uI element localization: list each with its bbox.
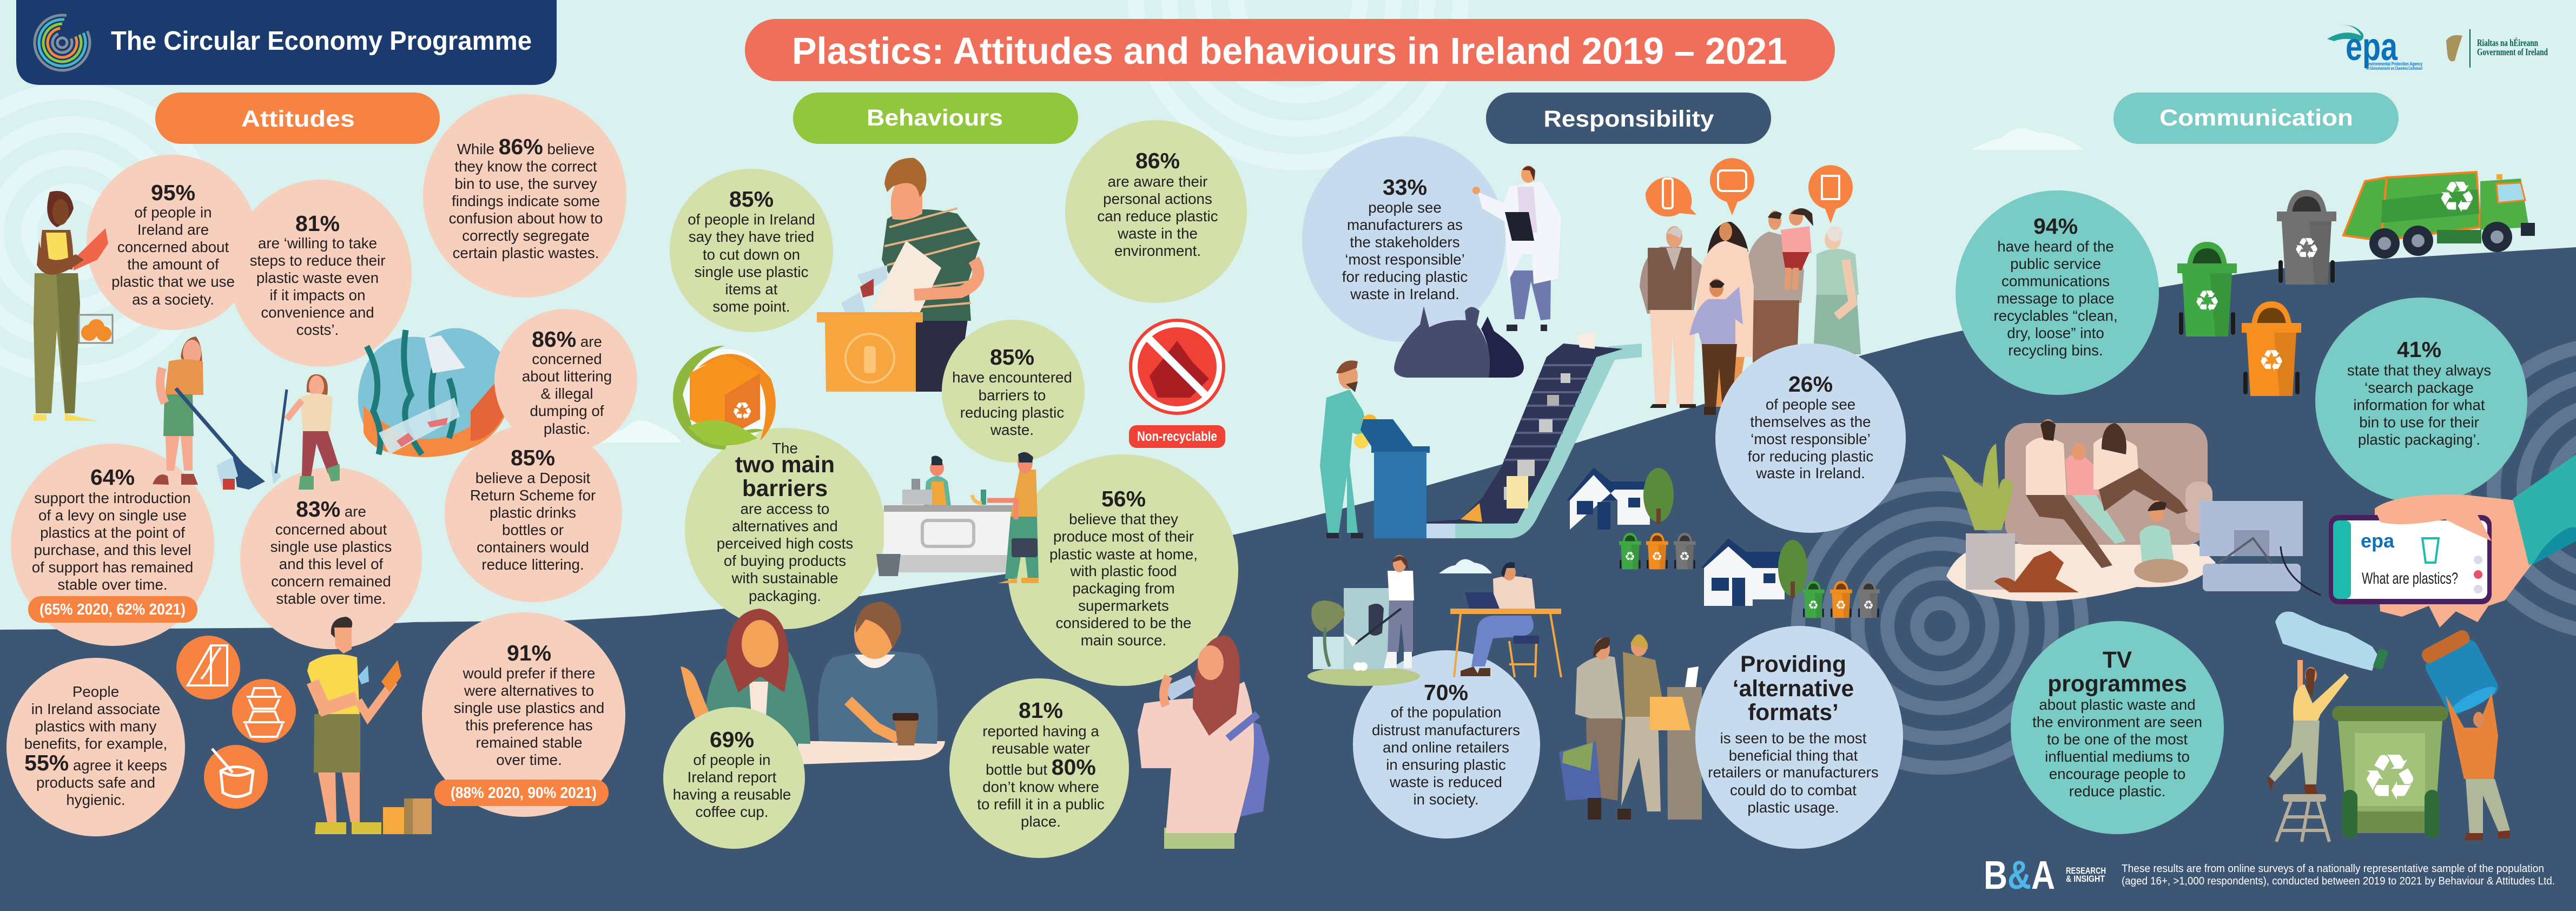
bubble: 94% clean dry loose: 94% xyxy=(2033,214,2078,239)
bubble: 56% home: main source. xyxy=(1081,632,1166,649)
icon: recycling box: ♻ xyxy=(731,398,753,425)
icon: food container speech bubble xyxy=(1710,158,1754,215)
bubble: 86% littering xyxy=(494,309,637,452)
bubble: 85% barriers: waste. xyxy=(990,421,1034,438)
illustration: orange wheelie bin: ♻ xyxy=(2258,344,2284,378)
bubble: 81% willing: convenience and xyxy=(261,304,374,321)
bubble: providing alternative formats: beneficial thing that xyxy=(1729,747,1858,764)
bubble: 91% alternatives: 91% xyxy=(507,641,551,665)
bubble: people associate benefits: plastics with many xyxy=(35,718,156,735)
bubble: 64% levy: purchase, and this level xyxy=(34,542,191,558)
illustration: man sorting waste into bin xyxy=(817,158,980,392)
callout: 2020 2021 alternatives xyxy=(434,780,609,806)
boy xyxy=(1689,279,1743,415)
section heading: Communication xyxy=(2113,93,2399,144)
bubble: 86% aware xyxy=(1065,120,1247,303)
bubble: 70% distrust: and online retailers xyxy=(1383,739,1509,756)
logo: Government of Ireland: Government of Ireland xyxy=(2477,47,2548,57)
bubble: 33% manufacturers: manufacturers as xyxy=(1347,216,1463,233)
bubble: 41% search packaging: ‘search package xyxy=(2364,379,2474,396)
bubble: 70% distrust: of the population xyxy=(1391,704,1501,721)
bubble: 86% littering: concerned xyxy=(532,351,602,367)
callout: 2020 2021 levy xyxy=(28,596,197,623)
bubble: 91% alternatives: remained stable xyxy=(475,734,583,751)
grandfather xyxy=(1640,226,1702,408)
bubble: 91% alternatives xyxy=(422,612,625,817)
cloud top right xyxy=(1971,128,2084,150)
bubble: 85% cut down: of people in Ireland xyxy=(688,211,815,228)
bubble: 64% levy: of a levy on single use xyxy=(38,507,187,524)
bubble: 41% search packaging: bin to use for their xyxy=(2359,414,2479,431)
bubble: 64% levy xyxy=(11,444,214,646)
bubble: 86% littering: 86% are xyxy=(532,327,602,352)
grandmother xyxy=(1813,226,1861,354)
bubble: TV programmes: encourage people to xyxy=(2049,765,2185,782)
illustration: man with packaging xyxy=(307,617,432,834)
bubble: 26% themselves: 26% xyxy=(1788,372,1833,397)
logo: B&A research and insight: & INSIGHT xyxy=(2066,874,2105,884)
footer note: (aged 16+, >1,000 respondents), conducted between 2019 to 2021 by Behaviour & Attitudes Ltd. xyxy=(2122,875,2555,887)
bubble shape: 95% xyxy=(87,155,257,330)
bubble: 86% correct bin: confusion about how to xyxy=(449,210,603,227)
bubble: 94% clean dry loose: have heard of the xyxy=(1997,238,2114,255)
illustration: hand holding phone xyxy=(2329,454,2576,628)
daughter xyxy=(1781,208,1813,289)
bubble: 83% single use: single use plastics xyxy=(270,538,392,555)
bubble: 56% home: 56% xyxy=(1101,486,1146,511)
bubble: 41% search packaging: 41% xyxy=(2397,337,2441,362)
bubble: 26% themselves xyxy=(1715,344,1906,533)
illustration: couple shopping xyxy=(1559,634,1702,820)
bubble: 86% aware: 86% xyxy=(1135,148,1180,173)
icon: bottle speech bubble xyxy=(1646,177,1696,216)
bubble: providing alternative formats: formats’ xyxy=(1748,700,1839,725)
bubble: 85% cut down: to cut down on xyxy=(703,246,800,263)
illustration: rubbish bags xyxy=(1394,306,1524,378)
bubble: 86% correct bin: certain plastic wastes. xyxy=(453,245,599,261)
bubble: 94% clean dry loose xyxy=(1956,190,2159,395)
illustration: green wheelie bin: ♻ xyxy=(2194,284,2220,318)
illustration: recycling truck: ♻ xyxy=(2438,172,2476,222)
text: 95% concerned: Ireland are xyxy=(137,221,209,238)
bubble: 64% levy: 64% xyxy=(90,465,135,490)
bubble: 56% home: produce most of their xyxy=(1053,528,1194,545)
icon: recycling box xyxy=(673,346,776,450)
logo: B&A research and insight: RESEARCH xyxy=(2066,866,2106,876)
bubble: 85% barriers xyxy=(942,320,1085,463)
bubble: people associate benefits: products safe and xyxy=(36,774,155,791)
bubble: 85% deposit return: plastic drinks xyxy=(490,504,576,521)
bubble: 56% home: plastic waste at home, xyxy=(1049,546,1198,563)
bubble: two main barriers xyxy=(685,428,885,629)
illustration: green wheelie bin xyxy=(2177,242,2237,336)
bubble: TV programmes: TV xyxy=(2103,648,2132,673)
bubble: 33% manufacturers: ‘most responsible’ xyxy=(1345,251,1465,268)
illustration: waste worker and blue bin xyxy=(1320,360,1430,538)
illustration: recycling truck xyxy=(2343,172,2535,259)
bubble: 86% aware: are aware their xyxy=(1108,173,1207,190)
bubble: 69% coffee cup: having a reusable xyxy=(673,786,791,803)
bubble: two main barriers: two main xyxy=(735,452,835,478)
illustration: customer at checkout xyxy=(987,452,1039,583)
cloud middle xyxy=(595,420,682,443)
bubble: 81% water bottle: 81% xyxy=(1019,698,1063,723)
section heading: Behaviours: Behaviours xyxy=(867,105,1003,131)
bubble: people associate benefits: in Ireland associate xyxy=(31,701,160,717)
section heading: Communication: Communication xyxy=(2159,105,2353,131)
bubble: 33% manufacturers: waste in Ireland. xyxy=(1350,286,1459,302)
bubble: 86% correct bin: they know the correct xyxy=(454,158,597,175)
bubble: 56% home: believe that they xyxy=(1069,511,1178,527)
bubble: 69% coffee cup: of people in xyxy=(693,751,771,768)
bubble: 86% aware: environment. xyxy=(1114,242,1201,259)
light ring pattern centre xyxy=(1136,0,1461,162)
icon: coffee tub xyxy=(204,745,268,809)
bubble: providing alternative formats: could do to combat xyxy=(1730,782,1857,798)
illustration: people with giant bottle, jar and bin: ♻ xyxy=(2361,740,2419,815)
bubble: 69% coffee cup: 69% xyxy=(710,727,754,752)
bubble: providing alternative formats: ‘alternative xyxy=(1733,676,1854,702)
logo: EPA xyxy=(2327,25,2422,71)
illustration: seaweed and plastic xyxy=(358,328,505,457)
callout: 2020 2021 levy: (65% 2020, 62% 2021) xyxy=(39,601,186,618)
bubble: 91% alternatives: this preference has xyxy=(465,717,593,734)
bubble: 26% themselves: themselves as the xyxy=(1750,413,1871,430)
bubble: people associate benefits xyxy=(6,658,185,836)
bubble: people associate benefits: 55% agree it keeps xyxy=(24,750,167,775)
bubble: 85% deposit return: containers would xyxy=(477,539,589,556)
callout: Non-recyclable label: Non-recyclable xyxy=(1137,429,1217,444)
illustration: hand holding phone: What are plastics? xyxy=(2362,570,2458,587)
text: 95% concerned: the amount of xyxy=(127,256,219,273)
bubble: 81% willing: steps to reduce their xyxy=(250,252,385,269)
bubble: providing alternative formats xyxy=(1695,626,1903,849)
callout: Non-recyclable label xyxy=(1129,425,1225,448)
bubble: 81% water bottle: reported having a xyxy=(982,723,1099,740)
illustration: three bins one: ♻ xyxy=(1679,550,1690,564)
bubble: 91% alternatives: were alternatives to xyxy=(464,682,594,699)
bubble: 91% alternatives: single use plastics and xyxy=(454,699,604,716)
illustration: family watching tv on sofa xyxy=(1942,419,2216,602)
bubble: 26% themselves: ‘most responsible’ xyxy=(1751,431,1871,447)
footer note xyxy=(2122,863,2555,887)
bubble: people associate benefits: People xyxy=(72,683,119,700)
text: 95% concerned: plastic that we use xyxy=(111,273,235,290)
dark hill xyxy=(0,247,2576,911)
illustration: people with giant bottle, jar and bin xyxy=(2267,611,2510,842)
bubble: 85% deposit return: bottles or xyxy=(502,521,564,538)
illustration: grey wheelie bin: ♻ xyxy=(2294,232,2320,266)
logo: EPA: Environmental Protection Agency xyxy=(2366,61,2422,67)
illustration: waste conveyor belt xyxy=(1401,331,1642,538)
callout: 2020 2021 alternatives: (88% 2020, 90% 2021) xyxy=(451,784,597,802)
bubble: 94% clean dry loose: dry, loose” into xyxy=(2007,325,2104,341)
illustration: orange wheelie bin xyxy=(2242,301,2301,396)
bubble: 85% cut down: single use plastic xyxy=(695,263,809,280)
bubble: 69% coffee cup: Ireland report xyxy=(688,769,777,785)
illustration: woman with basket xyxy=(34,191,113,421)
bubble: 69% coffee cup: coffee cup. xyxy=(696,803,768,820)
illustration: three bins two xyxy=(1802,581,1880,618)
text: 95% concerned: 95% xyxy=(151,180,195,205)
bubble: 85% cut down: say they have tried xyxy=(689,228,814,245)
bubble: 94% clean dry loose: communications xyxy=(2002,273,2110,289)
bubble: 64% levy: stable over time. xyxy=(57,576,168,593)
bubble: 85% cut down: some point. xyxy=(712,298,790,315)
bubble: 26% themselves: waste in Ireland. xyxy=(1755,465,1865,481)
bubble: TV programmes: the environment are seen xyxy=(2032,714,2202,730)
bubble: two main barriers: packaging. xyxy=(749,587,821,604)
section heading: Behaviours xyxy=(793,93,1078,144)
illustration: three bins two: ♻ xyxy=(1808,599,1819,612)
bubble: TV programmes xyxy=(2011,621,2224,834)
logo: Government of Ireland: Rialtas na hÉireann xyxy=(2477,37,2538,48)
bubble: 33% manufacturers: the stakeholders xyxy=(1350,234,1460,250)
bubble: two main barriers: The xyxy=(772,440,798,457)
bubble: 70% distrust: in ensuring plastic xyxy=(1386,756,1506,773)
bubble: 85% deposit return: believe a Deposit xyxy=(475,470,591,486)
bubble: 41% search packaging: information for what xyxy=(2353,397,2485,413)
bubble: 86% littering: dumping of xyxy=(530,402,604,419)
bubble: 81% willing: if it impacts on xyxy=(270,287,365,303)
illustration: three bins two: ♻ xyxy=(1863,599,1874,612)
bubble: 33% manufacturers: 33% xyxy=(1383,175,1427,200)
bubble: 86% correct bin: bin to use, the survey xyxy=(454,175,597,192)
logo: EPA: epa xyxy=(2346,25,2398,69)
bubble: 86% aware: personal actions xyxy=(1103,190,1212,207)
bubble: 64% levy: support the introduction xyxy=(34,490,191,506)
icon: non-recyclable sign xyxy=(1129,324,1225,448)
bubble: 86% correct bin: findings indicate some xyxy=(452,193,600,209)
bubble: 33% manufacturers: for reducing plastic xyxy=(1342,268,1468,285)
bubble: 83% single use: stable over time. xyxy=(276,590,386,607)
bubble: TV programmes: reduce plastic. xyxy=(2069,783,2165,800)
bubble: two main barriers: alternatives and xyxy=(732,518,838,534)
father xyxy=(1747,210,1804,362)
bubble: two main barriers: barriers xyxy=(742,476,828,501)
bubble: TV programmes: influential mediums to xyxy=(2045,748,2190,765)
bubble: 56% home: supermarkets xyxy=(1078,597,1169,614)
bubble: 85% cut down xyxy=(670,169,833,332)
bubble: 83% single use: concerned about xyxy=(275,521,387,538)
illustration: checkout scene xyxy=(876,456,1013,576)
illustration: woman with rake xyxy=(153,336,281,490)
bubble: people associate benefits: benefits, for example, xyxy=(24,735,167,752)
bubble: 94% clean dry loose: public service xyxy=(2010,255,2101,272)
bubble: 41% search packaging: state that they always xyxy=(2347,362,2491,379)
bubble: providing alternative formats: plastic usage. xyxy=(1747,799,1839,816)
bubble: 85% barriers: barriers to xyxy=(979,387,1046,404)
bubble: 56% home: with plastic food xyxy=(1070,563,1177,579)
illustration: three bins one xyxy=(1619,533,1696,569)
header bar: The Circular Economy Programme xyxy=(16,0,557,85)
text: 95% concerned: as a society. xyxy=(132,291,214,308)
bubble: 81% water bottle xyxy=(949,678,1129,858)
cloud over dark area xyxy=(1439,559,1492,573)
bubble: 69% coffee cup xyxy=(663,707,805,849)
illustration: two people with coffee xyxy=(681,602,945,764)
bubble: 86% littering: & illegal xyxy=(541,385,593,402)
header title: The Circular Economy Programme xyxy=(111,27,532,56)
bubble: TV programmes: programmes xyxy=(2047,671,2187,697)
logo: B&A research and insight xyxy=(1984,853,2106,897)
icon: sandwich pack xyxy=(176,636,240,699)
illustration: house one xyxy=(1567,467,1674,530)
illustration: woman with laptop xyxy=(1450,562,1561,677)
bubble: 85% deposit return xyxy=(445,425,622,602)
icon: carton speech bubble xyxy=(1808,165,1853,223)
illustration: litter picking woman xyxy=(1307,555,1420,686)
section heading: Responsibility: Responsibility xyxy=(1544,106,1714,132)
bubble: 86% aware: can reduce plastic xyxy=(1097,208,1218,225)
bubble: providing alternative formats: retailers or manufacturers xyxy=(1708,764,1879,781)
bubble: two main barriers: with sustainable xyxy=(731,570,838,586)
bubble: 83% single use: concern remained xyxy=(271,573,391,590)
bubble: 85% barriers: have encountered xyxy=(952,369,1072,386)
bubble: 94% clean dry loose: message to place xyxy=(1997,290,2115,307)
dark ring pattern centre xyxy=(1798,484,2082,768)
illustration: hand holding phone: epa xyxy=(2361,530,2395,552)
bubble: 56% home: packaging from xyxy=(1072,580,1175,597)
bubble: 70% distrust: 70% xyxy=(1424,680,1468,705)
bubble: 81% water bottle: to refill it in a public xyxy=(977,796,1105,813)
logo: EPA: An Ghníomhaireacht um Chaomhnú Comhshaoil xyxy=(2366,66,2422,71)
bubble: 85% barriers: 85% xyxy=(990,345,1034,369)
bubble: 85% deposit return: 85% xyxy=(511,445,555,470)
bubble: TV programmes: to be one of the most xyxy=(2047,731,2188,748)
mother xyxy=(1695,222,1754,407)
bubble: 26% themselves: for reducing plastic xyxy=(1748,448,1873,465)
illustration: girl drinking from bottle xyxy=(1138,635,1270,849)
logo: B&A research and insight: B&A xyxy=(1984,853,2055,897)
icon: food containers xyxy=(232,679,296,743)
bubble: 86% littering: about littering xyxy=(522,368,612,385)
bubble: 56% home: considered to be the xyxy=(1056,615,1191,631)
bubble: providing alternative formats: is seen to be the most xyxy=(1720,730,1867,747)
main title: Plastics: Attitudes and behaviours in Ireland 2019 – 2021 xyxy=(792,30,1787,72)
bubble: 85% cut down: items at xyxy=(725,281,778,298)
bubble: 41% search packaging xyxy=(2315,298,2527,503)
bubble: 85% deposit return: reduce littering. xyxy=(481,556,584,573)
bubble: 70% distrust xyxy=(1353,650,1540,839)
main title xyxy=(745,19,1835,81)
bubble: 56% home xyxy=(1008,454,1238,686)
illustration: three bins one: ♻ xyxy=(1652,550,1662,564)
bubble: 64% levy: of support has remained xyxy=(32,559,193,576)
logo: Government of Ireland xyxy=(2446,29,2548,68)
light ring pattern left xyxy=(0,91,212,374)
bubble: 91% alternatives: over time. xyxy=(496,751,562,768)
illustration: family group xyxy=(1640,158,1861,415)
illustration: grey wheelie bin xyxy=(2277,190,2336,285)
bubble: 81% willing: plastic waste even xyxy=(256,269,379,286)
bubble: 83% single use xyxy=(240,467,422,649)
bubble: 64% levy: plastics at the point of xyxy=(40,524,185,541)
bubble: 70% distrust: in society. xyxy=(1413,791,1479,808)
illustration: child litter picker xyxy=(276,374,340,490)
bubble: 70% distrust: waste is reduced xyxy=(1389,774,1502,790)
bubble: 81% willing: costs’. xyxy=(296,321,339,338)
section heading: Attitudes xyxy=(155,93,440,144)
bubble: 94% clean dry loose: recyclables “clean, xyxy=(1993,307,2118,324)
illustration: three bins one: ♻ xyxy=(1624,550,1635,564)
illustration: house two xyxy=(1701,538,1807,606)
bubble: 91% alternatives: would prefer if there xyxy=(463,665,595,682)
text: 95% concerned: of people in xyxy=(134,204,212,221)
bubble: people associate benefits: hygienic. xyxy=(66,791,126,808)
bubble: 70% distrust: distrust manufacturers xyxy=(1372,722,1520,738)
bubble: 86% correct bin: While 86% believe xyxy=(457,134,595,159)
bubble: 81% willing: 81% xyxy=(295,211,340,236)
bubble: two main barriers: perceived high costs xyxy=(717,535,853,552)
bubble: two main barriers: of buying products xyxy=(724,552,846,569)
bubble: 86% correct bin xyxy=(423,94,626,298)
section heading: Attitudes: Attitudes xyxy=(241,106,355,132)
bubble: 41% search packaging: plastic packaging’. xyxy=(2358,431,2480,448)
bubble: two main barriers: are access to xyxy=(741,500,829,517)
bubble: 81% water bottle: place. xyxy=(1021,813,1061,830)
bubble: 85% cut down: 85% xyxy=(729,187,774,212)
bubble: 86% littering: plastic. xyxy=(544,420,590,437)
bubble: 85% deposit return: Return Scheme for xyxy=(470,487,596,504)
bubble: 86% aware: waste in the xyxy=(1117,225,1198,242)
bubble: 81% water bottle: don’t know where xyxy=(982,778,1099,795)
bubble: 33% manufacturers: people see xyxy=(1368,199,1442,216)
dark ring pattern right xyxy=(2464,345,2576,632)
bubble: 83% single use: 83% are xyxy=(296,497,366,521)
bubble: 86% correct bin: correctly segregate xyxy=(462,227,590,244)
bubble: 81% water bottle: bottle but 80% xyxy=(986,755,1096,780)
icon: circular economy logo xyxy=(25,6,99,80)
illustration: back of TV xyxy=(2199,501,2321,595)
bubble: 94% clean dry loose: recycling bins. xyxy=(2008,342,2103,359)
section heading: Responsibility xyxy=(1486,93,1771,144)
bubble: 26% themselves: of people see xyxy=(1766,396,1855,413)
text: 95% concerned: concerned about xyxy=(117,239,229,255)
bubble: 33% manufacturers xyxy=(1302,136,1505,342)
bubble: TV programmes: about plastic waste and xyxy=(2039,696,2196,713)
illustration: doctor with clipboard xyxy=(1472,166,1561,331)
bubble: 85% barriers: reducing plastic xyxy=(960,404,1064,421)
bubble: 81% water bottle: reusable water xyxy=(992,740,1090,757)
bubble: 83% single use: and this level of xyxy=(279,556,383,572)
bubble: 81% willing: are ‘willing to take xyxy=(258,235,377,252)
footer note: These results are from online surveys of a nationally representative sample of the population xyxy=(2122,863,2544,875)
bubble: providing alternative formats: Providing xyxy=(1740,652,1846,677)
bubble: 81% willing xyxy=(230,180,412,367)
illustration: three bins two: ♻ xyxy=(1835,599,1846,612)
